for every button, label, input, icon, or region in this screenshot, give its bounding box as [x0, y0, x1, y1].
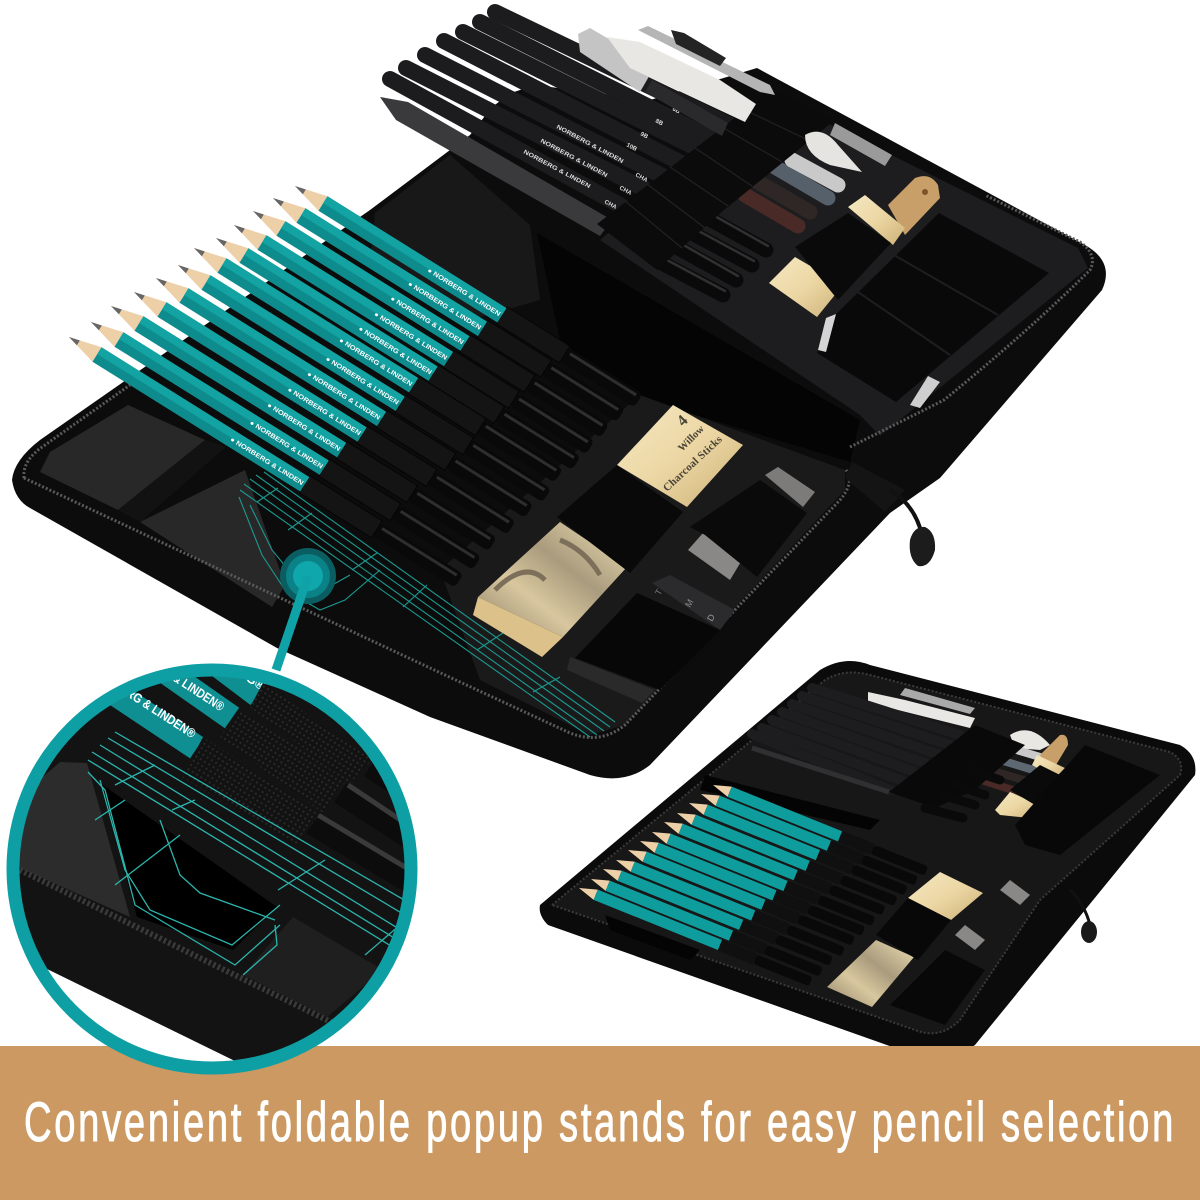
pencil labels: CHA: [618, 185, 633, 197]
upper pencil sleeves: [597, 90, 835, 270]
sandpaper block and leather tab: [769, 176, 940, 317]
small graphite blocks: [1000, 880, 1030, 905]
magnified teal wireframe: [88, 732, 430, 975]
upper panel lining: [600, 95, 1088, 436]
lower panel inner floor: [440, 395, 845, 735]
lower panel velcro strip: [118, 440, 226, 522]
magnified teal pencils: [110, 676, 266, 758]
caption banner: [0, 1046, 1200, 1200]
pencil 1: ● NORBERG & LINDEN: [229, 436, 305, 487]
pencil 10: [248, 203, 610, 439]
magnified pencil lettering: & LINDEN®: [170, 670, 227, 714]
magnified stub highlights: [317, 783, 404, 870]
pencil 8: ● NORBERG & LINDEN: [357, 325, 433, 377]
sharpened woodless pencil: [380, 97, 612, 236]
pencil 7: ● NORBERG & LINDEN: [337, 337, 414, 388]
magnified contents: [20, 676, 404, 1060]
magnified pencil lettering: [126, 678, 264, 737]
magnified grey lining: [20, 762, 130, 917]
magnified pencil lettering: G®: [243, 670, 268, 693]
pencil 2: ● NORBERG & LINDEN: [248, 420, 324, 471]
graphite blocks with elastic: [688, 467, 815, 580]
teal popup stand wireframe: [239, 472, 615, 737]
case shell: [12, 68, 1106, 778]
zipper pull with toggle: [845, 462, 935, 566]
gold kneaded eraser block: [473, 522, 627, 657]
white paper stump with metal ferrule: [578, 26, 775, 136]
pencil 1: [64, 329, 464, 589]
pencil labels: CHA: [603, 199, 618, 211]
T M D soft pastel keys with elastic: T: [653, 587, 665, 597]
pencil 9: [229, 217, 595, 456]
small elastic and pockets: [1010, 765, 1060, 805]
magnified elastic sleeves: [182, 737, 320, 847]
willow charcoal box: [617, 405, 743, 507]
small sandpaper block: [1040, 735, 1068, 775]
right elastic pocket block with silver tips: [817, 213, 1049, 408]
small zipper toggle: [1070, 890, 1090, 925]
sleeve seams: [625, 110, 808, 248]
lower panel lining left flap: [40, 405, 205, 510]
T M D soft pastel keys with elastic: M: [683, 598, 695, 609]
T M D soft pastel keys with elastic: D: [705, 612, 717, 623]
small elastics: [876, 898, 951, 960]
magnified right lining: [243, 917, 383, 1017]
small popup strap: [605, 775, 880, 960]
pencil 2: [86, 314, 482, 572]
small willow box: [908, 872, 983, 920]
pencil 11: [268, 190, 626, 424]
pencil 6: [173, 257, 552, 504]
upper zipper: [850, 195, 1092, 447]
small lining: [552, 672, 1181, 1033]
black popup well: [537, 233, 860, 462]
pencil labels: CHA: [634, 172, 649, 184]
pencil 9: ● NORBERG & LINDEN: [372, 311, 448, 362]
pencil labels: 10B: [625, 142, 638, 153]
pencil 3: ● NORBERG & LINDEN: [266, 402, 342, 453]
pencil 6: ● NORBERG & LINDEN: [324, 356, 400, 407]
pencil 12: [290, 178, 644, 409]
pencil 10: ● NORBERG & LINDEN: [389, 295, 465, 346]
pencil labels: NORBERG & LINDEN: [555, 124, 624, 165]
stub highlights: [665, 215, 768, 291]
magnified detail circle: [6, 664, 418, 1074]
pencil 12: ● NORBERG & LINDEN: [426, 267, 502, 318]
popup stand fold: [370, 155, 540, 320]
pencil 11: ● NORBERG & LINDEN: [406, 281, 482, 332]
charcoal and graphite sticks: [745, 160, 838, 226]
main open pencil case: [12, 68, 1106, 778]
blending tip and metal nib: [805, 123, 892, 172]
pencil 5: ● NORBERG & LINDEN: [305, 371, 382, 422]
pencil labels: [522, 106, 681, 211]
magnified black pencil stubs: [310, 767, 420, 888]
small teal pencils: [577, 779, 928, 987]
pencil labels: 9B: [639, 131, 649, 141]
small upper black pencils: [752, 688, 960, 790]
twelve teal graphite pencils: [64, 178, 644, 589]
pencil 5: [151, 270, 534, 520]
pencil labels: NORBERG & LINDEN: [522, 149, 591, 190]
pencil 3: [106, 298, 498, 553]
pencil 4: [129, 284, 517, 536]
small woodless pencil: [752, 748, 889, 792]
lower zipper: [24, 385, 849, 738]
willow charcoal box: Charcoal Sticks: [661, 433, 725, 494]
pencil labels: NORBERG & LINDEN: [539, 138, 608, 179]
small case shell: [540, 661, 1195, 1058]
magnified black well: [100, 783, 277, 950]
elastic band over erasers: [557, 465, 683, 573]
willow charcoal box: 4: [674, 412, 691, 430]
pencil 7: [189, 240, 564, 484]
small zipper: [552, 672, 1181, 1033]
teal ring: [13, 670, 411, 1068]
small gold eraser: [827, 940, 914, 1007]
small sleeves: [889, 725, 1025, 808]
magnified zipper: [20, 870, 333, 1023]
magnified pencil lettering: RG & LINDEN®: [123, 685, 199, 741]
small stubs: [925, 770, 1000, 818]
upper panel charcoal and graphite pencils: [380, 12, 838, 295]
lower panel lining right flap: [140, 470, 285, 607]
small upper tools: [868, 692, 975, 728]
black pencil barrels: [390, 12, 730, 208]
callout marker on popup stand: [276, 548, 336, 670]
stubs below the sleeves: [660, 218, 766, 295]
pencil labels: 6B: [671, 106, 681, 116]
willow charcoal box: Willow: [676, 423, 707, 454]
magnified case body: [20, 676, 404, 1060]
pencil 4: ● NORBERG & LINDEN: [286, 386, 362, 437]
pencil labels: 8B: [654, 118, 664, 128]
pencil 8: [211, 230, 582, 472]
small overview of the open case: [540, 661, 1195, 1058]
T M D soft pastel keys with elastic: [567, 575, 735, 703]
